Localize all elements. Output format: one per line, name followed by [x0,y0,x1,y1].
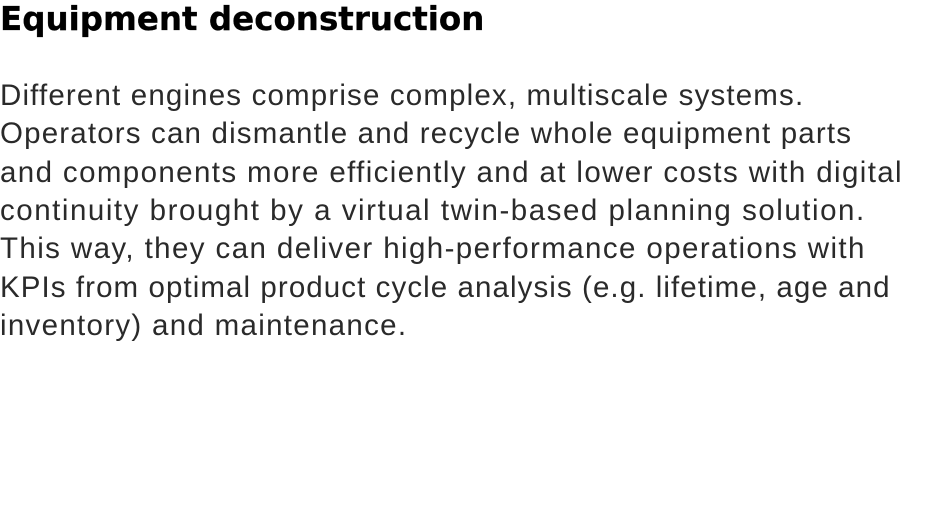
text block: description: continuity brought by a virtual twin-based planning solution. [0,194,866,227]
text block: description: Different engines comprise complex, multiscale systems. [0,79,804,112]
text block: description: inventory) and maintenance. [0,309,407,342]
text block: description: Operators can dismantle and recycle whole equipment parts [0,117,852,150]
title: Equipment deconstruction [0,0,484,38]
text block: description: KPIs from optimal product cycle analysis (e.g. lifetime, age and [0,271,891,304]
text block: description [0,79,903,342]
text block: description: This way, they can deliver high-performance operations with [0,232,866,265]
text block: description: and components more efficiently and at lower costs with digital [0,156,903,189]
